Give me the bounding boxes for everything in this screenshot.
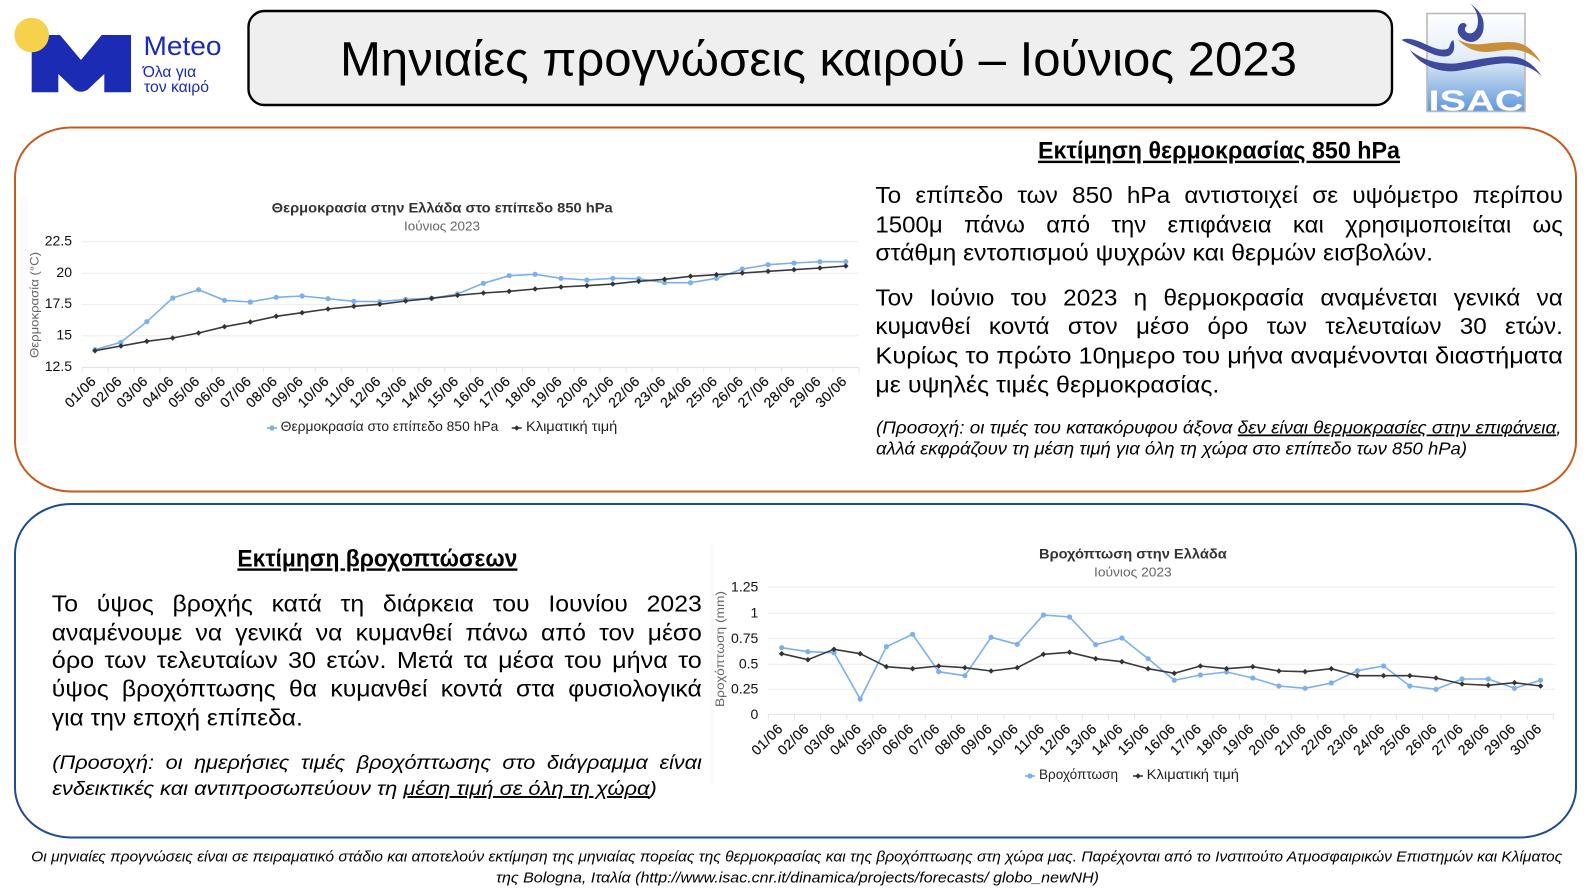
x axis labels: 18/06	[501, 373, 539, 411]
paragraph 2: Κυρίως το πρώτο 10ημερο του μήνα αναμένονται διαστήματα	[875, 342, 1563, 368]
y axis labels: 0.25	[731, 680, 759, 696]
logo tagline line 1: Όλα για	[142, 64, 196, 81]
paragraph: Το ύψος βροχής κατά τη διάρκεια του Ιουνίου 2023	[52, 590, 702, 616]
paragraph 1	[875, 182, 1563, 266]
x axis labels: 11/06	[1010, 720, 1048, 757]
x axis labels: 09/06	[957, 720, 995, 758]
x axis labels: 22/06	[605, 373, 643, 411]
x axis labels	[61, 373, 850, 411]
paragraph 2	[875, 284, 1563, 398]
x axis labels: 13/06	[372, 373, 410, 411]
y axis labels	[731, 578, 759, 722]
panel border	[15, 504, 1576, 838]
logo: ISAC	[1402, 3, 1542, 118]
note: (Προσοχή: οι τιμές του κατακόρυφου άξονα δεν είναι θερμοκρασίες στην επιφάνεια ,	[876, 418, 1562, 438]
y axis labels	[45, 232, 72, 374]
x axis labels: 10/06	[294, 373, 332, 411]
x axis labels: 12/06	[1036, 720, 1074, 758]
text block: rainfall	[52, 545, 702, 800]
paragraph 1: Το επίπεδο των 850 hPa αντιστοιχεί σε υψόμετρο περίπου	[875, 182, 1563, 208]
x axis labels: 26/06	[709, 373, 746, 411]
icon: Meteo M	[32, 35, 131, 92]
x axis labels: 16/06	[1141, 720, 1178, 758]
x axis labels: 17/06	[475, 373, 513, 411]
x axis labels: 05/06	[853, 720, 891, 758]
x axis labels: 23/06	[631, 373, 669, 411]
y axis labels: 0.5	[739, 656, 759, 672]
x axis labels: 26/06	[1402, 720, 1440, 758]
logo tagline line 2: τον καιρό	[144, 79, 209, 96]
footer note: Οι μηνιαίες προγνώσεις είναι σε πειραματικό στάδιο και αποτελούν εκτίμηση της μηνιαίας πορείας της θερμοκρασίας και της βροχόπτωσης στη χώρα μας. Παρέχονται από το Ινστιτούτο Ατμοσφαιρικών Επιστημών και Κλίματος	[31, 850, 1563, 866]
paragraph 1: στάθμη εντοπισμού ψυχρών και θερμών εισβολών.	[875, 240, 1433, 266]
title box	[248, 11, 1392, 105]
note	[876, 418, 1562, 459]
x axis labels: 20/06	[553, 373, 591, 411]
y axis labels: 1	[751, 604, 759, 620]
x axis labels: 15/06	[1114, 720, 1152, 758]
panel border	[15, 128, 1576, 492]
x axis labels: 29/06	[786, 373, 824, 411]
paragraph: ύψος βροχόπτωσης θα κυμανθεί κοντά στα φυσιολογικά	[52, 676, 702, 702]
x axis labels: 20/06	[1245, 720, 1283, 758]
y axis labels: 15	[56, 326, 72, 342]
y axis labels: 0	[751, 706, 759, 722]
series: climatology	[782, 649, 1541, 686]
logo text: ISAC	[1428, 86, 1524, 118]
chart subtitle: Ιούνιος 2023	[404, 220, 480, 234]
chart subtitle: Ιούνιος 2023	[1094, 566, 1172, 580]
legend: Κλιματική τιμή	[526, 419, 617, 434]
legend	[267, 419, 617, 434]
x axis labels: 13/06	[1062, 720, 1100, 758]
text block: temperature	[875, 138, 1563, 459]
x axis labels: 04/06	[826, 720, 864, 758]
x axis labels: 25/06	[1376, 720, 1414, 758]
x axis labels: 17/06	[1167, 720, 1205, 758]
note: αλλά εκφράζουν τη μέση τιμή για όλη τη χώρα στο επίπεδο των 850 hPa)	[876, 439, 1467, 459]
note: (Προσοχή: οι ημερήσιες τιμές βροχόπτωσης στο διάγραμμα είναι	[52, 752, 702, 774]
y axis title: Θερμοκρασία (°C)	[28, 252, 42, 358]
chart: rainfall	[710, 545, 1556, 785]
x axis labels: 23/06	[1324, 720, 1362, 758]
logo wordmark: Meteo	[144, 31, 222, 61]
y axis labels: 1.25	[731, 578, 759, 594]
x axis labels: 19/06	[1219, 720, 1257, 758]
paragraph 2: κυμανθεί κοντά στον μέσο όρο των τελευταίων 30 ετών.	[875, 313, 1563, 339]
x axis labels: 01/06	[61, 373, 99, 411]
x axis labels: 28/06	[1455, 720, 1492, 758]
y axis labels: 22.5	[45, 232, 72, 248]
x axis labels: 28/06	[760, 373, 798, 411]
x axis labels: 21/06	[1271, 720, 1309, 758]
paragraph 1: 1500μ πάνω από την επιφάνεια και χρησιμοποιείται ως	[875, 212, 1563, 238]
x axis labels: 11/06	[321, 373, 358, 410]
logo swooshes	[1402, 3, 1542, 76]
x axis labels: 15/06	[424, 373, 462, 411]
panel: rainfall	[15, 504, 1576, 838]
title banner	[248, 11, 1392, 105]
x axis labels: 14/06	[398, 373, 436, 411]
x axis labels: 09/06	[268, 373, 306, 411]
x axis labels: 30/06	[812, 373, 850, 411]
x axis labels: 02/06	[774, 720, 812, 758]
paragraph 2: Τον Ιούνιο του 2023 η θερμοκρασία αναμένεται γενικά να	[875, 284, 1563, 310]
heading: Εκτίμηση θερμοκρασίας 850 hPa	[1038, 138, 1401, 165]
logo: Meteo	[14, 18, 222, 96]
x axis labels: 24/06	[657, 373, 695, 411]
footer note	[31, 850, 1563, 887]
chart: temperature at 850 hPa	[20, 195, 860, 445]
y axis title: Βροχόπτωση (mm)	[713, 591, 727, 707]
x axis labels: 02/06	[87, 373, 125, 411]
legend: Θερμοκρασία στο επίπεδο 850 hPa	[281, 419, 499, 434]
x axis labels: 03/06	[113, 373, 151, 411]
x axis labels: 25/06	[683, 373, 721, 411]
x axis labels: 04/06	[139, 373, 177, 411]
x axis labels: 08/06	[931, 720, 969, 758]
x axis labels: 14/06	[1088, 720, 1126, 758]
legend: Κλιματική τιμή	[1147, 767, 1239, 782]
note: ενδεικτικές και αντιπροσωπεύουν τη μέση τιμή σε όλη τη χώρα )	[52, 778, 657, 800]
y axis labels: 17.5	[45, 295, 72, 311]
x axis labels: 24/06	[1350, 720, 1388, 758]
x axis labels: 07/06	[217, 373, 254, 411]
icon: sun	[14, 18, 49, 52]
x axis labels: 01/06	[748, 720, 786, 758]
paragraph: όρο των τελευταίων 30 ετών. Μετά τα μέσα του μήνα το	[52, 647, 702, 673]
panel: temperature	[15, 128, 1576, 492]
x axis labels: 03/06	[800, 720, 838, 758]
x axis labels: 27/06	[1428, 720, 1466, 758]
paragraph 2: με υψηλές τιμές θερμοκρασίας.	[875, 372, 1219, 398]
paragraph: αναμένουμε να γενικά να κυμανθεί πάνω από τον μέσο	[52, 620, 702, 646]
series: climatology	[95, 266, 846, 351]
x axis labels: 06/06	[191, 373, 229, 411]
series: temperature	[95, 262, 846, 350]
x axis labels: 18/06	[1193, 720, 1231, 758]
title: Μηνιαίες προγνώσεις καιρού – Ιούνιος 2023	[340, 34, 1297, 86]
chart title: Βροχόπτωση στην Ελλάδα	[1039, 545, 1227, 561]
footer note: της Bologna, Ιταλία (http://www.isac.cnr.it/dinamica/projects/forecasts/ globo_newNH)	[496, 871, 1099, 887]
x axis labels: 10/06	[983, 720, 1021, 758]
x axis labels	[748, 720, 1545, 758]
y axis labels: 12.5	[45, 358, 72, 374]
x axis labels: 22/06	[1298, 720, 1335, 758]
y axis labels: 20	[56, 264, 72, 280]
x axis labels: 30/06	[1507, 720, 1545, 758]
chart title: Θερμοκρασία στην Ελλάδα στο επίπεδο 850 hPa	[272, 200, 613, 216]
y axis labels: 0.75	[731, 630, 759, 646]
logo square	[1427, 14, 1525, 112]
x axis labels: 08/06	[242, 373, 280, 411]
x axis labels: 07/06	[905, 720, 943, 758]
x axis labels: 19/06	[527, 373, 565, 411]
series: rainfall	[782, 615, 1541, 699]
x axis labels: 06/06	[879, 720, 917, 758]
x axis labels: 12/06	[346, 373, 384, 411]
heading: Εκτίμηση βροχοπτώσεων	[237, 545, 517, 572]
paragraph: για την εποχή επίπεδα.	[52, 704, 303, 730]
x axis labels: 27/06	[734, 373, 772, 411]
paragraph	[52, 590, 702, 730]
x axis labels: 29/06	[1481, 720, 1519, 758]
legend	[1025, 767, 1239, 782]
note	[52, 752, 702, 800]
legend: Βροχόπτωση	[1039, 767, 1118, 782]
x axis labels: 21/06	[579, 373, 617, 411]
x axis labels: 16/06	[450, 373, 488, 411]
x axis labels: 05/06	[165, 373, 203, 411]
